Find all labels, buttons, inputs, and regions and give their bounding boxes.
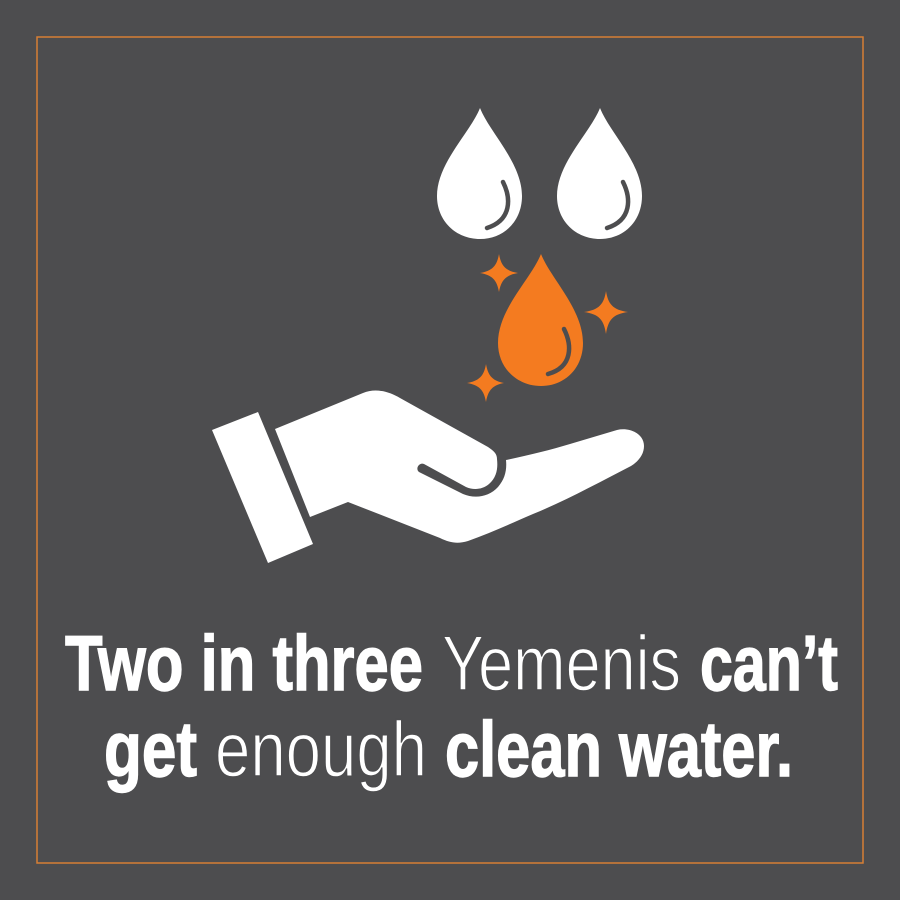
headline line 1: Two in three (65, 619, 423, 707)
icon: sparkle right (584, 291, 628, 334)
cuff (212, 412, 313, 563)
headline line 2: get (104, 705, 197, 793)
headline line 2 (104, 705, 793, 793)
headline line 2: enough (215, 705, 427, 793)
headline line 1: can’t (700, 619, 838, 707)
icon: hand (212, 391, 644, 563)
palm and fingers (275, 391, 644, 543)
headline line 1: Yemenis (442, 619, 681, 707)
headline line 1 (65, 619, 838, 707)
headline line 2: clean water. (445, 705, 793, 793)
icon: white water drop right (557, 108, 642, 239)
icon: sparkle top (480, 254, 518, 292)
headline (65, 619, 838, 793)
icon: sparkle bottom (467, 364, 504, 402)
icon: orange water drop (498, 254, 583, 386)
icon: white water drop left (437, 108, 522, 239)
